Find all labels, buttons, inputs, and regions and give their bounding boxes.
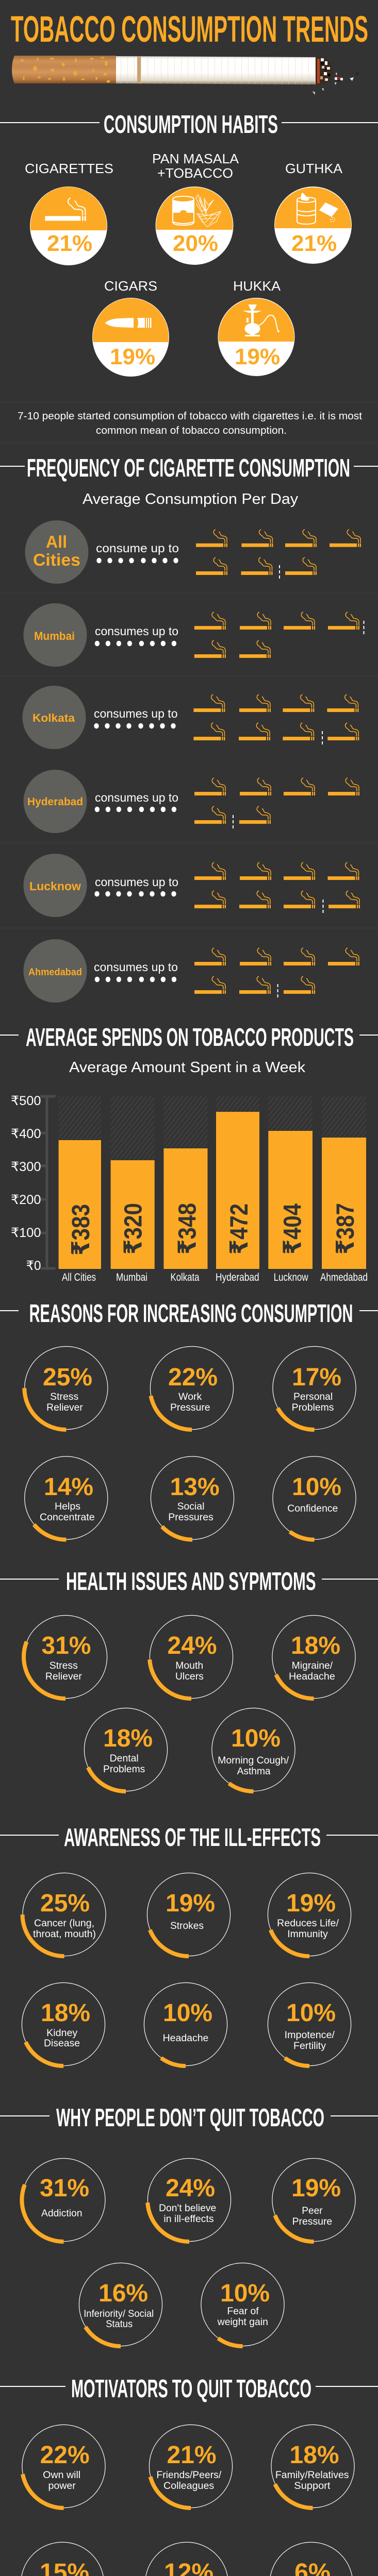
stat: dental problems 18%: Problems (103, 1764, 145, 1775)
row: lucknow (24, 854, 360, 917)
bar chart: weekly spend by city (11, 1094, 368, 1283)
stat: stress reliever 25%: Stress (50, 1392, 78, 1402)
stat: dental problems 18%: Dental (110, 1753, 139, 1764)
stat: cancer 25%: throat, mouth) (33, 1929, 96, 1940)
stat: headache 10%: 10% (163, 1999, 212, 2027)
stat: peer pressure 19% (272, 2158, 356, 2242)
stat: kidney disease 18%: Disease (44, 2038, 80, 2049)
stat: inferiority social status 16%: Inferiority/ Social (84, 2309, 154, 2319)
stat: confidence 10% (272, 1456, 356, 1539)
item: hukka 19% (218, 278, 295, 376)
bar: mumbai 320 (111, 1096, 155, 1283)
stat: stress reliever 25% (24, 1346, 108, 1430)
icon: cigar (105, 318, 152, 328)
item: cigarettes 21%: CIGARETTES (25, 161, 113, 176)
stat: mouth ulcers 24%: Ulcers (175, 1671, 204, 1682)
section: consumption habits (0, 111, 378, 443)
bar: lucknow 404: Lucknow (274, 1272, 308, 1283)
bar: mumbai 320: ₹320 (120, 1203, 147, 1255)
stat: morning cough asthma 10%: Asthma (237, 1766, 271, 1777)
stat: headache 10% (144, 1982, 227, 2066)
row: lucknow: Lucknow (29, 879, 81, 893)
stat: helps concentrate 14% (24, 1456, 108, 1539)
stat: fear of weight gain 10%: 10% (220, 2280, 270, 2307)
y axis: ₹0 (26, 1259, 41, 1273)
stat: fear of weight gain 10% (201, 2263, 285, 2346)
stat: mouth ulcers 24%: Mouth (175, 1660, 203, 1671)
stat: don't believe 24%: Don't believe (159, 2203, 216, 2214)
bar: all cities 383: ₹383 (68, 1204, 95, 1256)
bar: ahmedabad 387: ₹387 (332, 1203, 359, 1255)
stat: impotence fertility 10%: Fertility (293, 2041, 326, 2052)
row: mumbai: consumes up to (95, 624, 178, 638)
subheading: average consumption per day: Average Consumption Per Day (83, 491, 299, 507)
stat: family relatives support 18%: 18% (290, 2442, 339, 2469)
stat: stress reliever 31%: Stress (50, 1660, 78, 1671)
stat: don't believe 24%: in ill-effects (163, 2214, 214, 2225)
stat: stress reliever 25%: 25% (43, 1364, 92, 1391)
item: pan masala + tobacco 20%: PAN MASALA (152, 151, 239, 166)
row: hyderabad (24, 770, 359, 833)
item: pan masala + tobacco 20%: 20% (173, 231, 218, 256)
stat: strokes 19% (147, 1873, 231, 1956)
section: awareness of the ill-effects (0, 1824, 378, 2066)
section: motivators to quit tobacco (0, 2375, 378, 2576)
stat: helps concentrate 14%: 14% (44, 1473, 93, 1501)
stat: inferiority social status 16%: Status (106, 2319, 133, 2330)
stat: morning cough asthma 10%: Morning Cough/ (218, 1755, 289, 1766)
stat: personal problems 17%: Personal (293, 1392, 333, 1402)
row: kolkata (23, 686, 359, 749)
section: average spends on tobacco products (0, 1024, 378, 1283)
item: guthka 21%: GUTHKA (285, 161, 343, 176)
y axis: ₹100 (11, 1226, 41, 1240)
item: pan masala + tobacco 20% (152, 151, 239, 265)
y axis: ₹400 (11, 1127, 41, 1141)
stat: impotence fertility 10%: 10% (286, 1999, 336, 2027)
row: all cities: consume up to (96, 541, 179, 555)
callout: cigarettes note: 7-10 people started consumption of tobacco with cigarettes i.e. it is most (18, 411, 362, 422)
row: mumbai (24, 603, 364, 667)
stat: family relatives support 18%: Support (294, 2481, 331, 2492)
stat: stress reliever 31% (24, 1615, 107, 1699)
stat: personal problems 17% (272, 1346, 356, 1430)
stat: cancer 25%: 25% (40, 1890, 90, 1917)
section: frequency of cigarette consumption (0, 454, 378, 1003)
stat: don't believe 24% (147, 2158, 231, 2242)
stat: confidence 10%: 10% (292, 1473, 341, 1501)
row: hyderabad: Hyderabad (27, 796, 83, 808)
row: mumbai: Mumbai (34, 630, 75, 642)
stat: mouth ulcers 24% (150, 1615, 233, 1699)
item: cigarettes 21% (25, 161, 113, 265)
item: guthka 21% (274, 161, 352, 264)
y axis: ₹500 (11, 1094, 41, 1108)
stat: peer pressure 19%: Pressure (292, 2216, 332, 2227)
row: hyderabad: consumes up to (95, 791, 178, 804)
stat: partner spouse 15% (21, 2542, 104, 2576)
stat: work pressure 22% (150, 1346, 234, 1430)
bar: hyderabad 472 (216, 1096, 259, 1283)
bar: mumbai 320: Mumbai (116, 1272, 147, 1283)
stat: fear of weight gain 10%: weight gain (217, 2317, 268, 2328)
row: ahmedabad (24, 939, 359, 1003)
stat: stress reliever 31%: 31% (41, 1632, 91, 1659)
subheading: average amount spent in a week: Average Amount Spent in a Week (69, 1059, 306, 1076)
row: kolkata: consumes up to (94, 707, 177, 720)
stat: own will power 22% (22, 2425, 105, 2508)
stat: doctor councellor 12% (145, 2542, 228, 2576)
row: ahmedabad: Ahmedabad (28, 967, 82, 978)
icon: cigarette (45, 198, 86, 221)
stat: own will power 22%: Own will (43, 2470, 80, 2481)
item: hukka 19%: HUKKA (233, 278, 281, 294)
stat: work pressure 22%: Pressure (170, 1402, 210, 1413)
bar: kolkata 348: Kolkata (170, 1272, 200, 1283)
stat: reduces life 19%: Immunity (287, 1929, 328, 1940)
stat: friends peers colleagues 21% (149, 2425, 233, 2508)
stat: peer pressure 19%: 19% (291, 2175, 341, 2202)
stat: migraine headache 18% (272, 1615, 356, 1699)
item: guthka 21%: 21% (291, 231, 337, 256)
illustration: burning cigarette (12, 56, 359, 95)
stat: morning cough asthma 10% (211, 1708, 295, 1791)
stat: own will power 22%: 22% (40, 2442, 90, 2469)
stat: inferiority social status 16%: 16% (98, 2280, 148, 2307)
item: cigars 19% (92, 278, 169, 377)
icon: tin and sachet (297, 193, 338, 224)
stat: stress reliever 31%: Reliever (45, 1671, 83, 1682)
stat: dental problems 18%: 18% (103, 1725, 153, 1752)
icon: can and tobacco leaves (173, 195, 221, 227)
item: cigarettes 21%: 21% (47, 231, 92, 256)
row: ahmedabad: consumes up to (94, 960, 178, 974)
stat: dental problems 18% (84, 1708, 168, 1791)
stat: work pressure 22%: 22% (168, 1364, 218, 1391)
stat: migraine headache 18%: 18% (291, 1632, 340, 1659)
stat: cancer 25%: Cancer (lung, (34, 1918, 94, 1929)
y axis: ₹200 (11, 1193, 41, 1207)
stat: addiction 31%: 31% (40, 2175, 89, 2202)
stat: personal problems 17%: Problems (292, 1402, 334, 1413)
stat: friends peers colleagues 21%: Colleagues (163, 2481, 214, 2492)
stat: own will power 22%: power (48, 2481, 76, 2492)
stat: peer pressure 19%: Peer (302, 2206, 323, 2216)
stat: family relatives support 18% (271, 2425, 355, 2508)
section: reasons for increasing consumption (0, 1300, 378, 1539)
bar: hyderabad 472: ₹472 (226, 1204, 253, 1255)
bar: ahmedabad 387: Ahmedabad (320, 1272, 368, 1283)
bar: ahmedabad 387 (320, 1096, 368, 1283)
y axis: ₹300 (11, 1160, 41, 1174)
callout: cigarettes note (0, 402, 378, 443)
stat: mouth ulcers 24%: 24% (167, 1632, 217, 1659)
row: kolkata: Kolkata (32, 711, 75, 724)
stat: social pressures 13%: Social (177, 1501, 204, 1512)
stat: migraine headache 18%: Migraine/ (292, 1660, 333, 1671)
callout: cigarettes note: common mean of tobacco consumption. (96, 425, 287, 436)
section: health issues and symptoms (0, 1568, 378, 1791)
stat: morning cough asthma 10%: 10% (231, 1725, 281, 1752)
stat: kidney disease 18%: 18% (41, 1999, 90, 2027)
bar: lucknow 404 (268, 1096, 313, 1283)
bar: all cities 383 (59, 1096, 101, 1283)
stat: cancer 25% (23, 1873, 106, 1956)
bar: all cities 383: All Cities (62, 1272, 96, 1283)
stat: friends peers colleagues 21%: 21% (167, 2442, 217, 2469)
stat: work pressure 22%: Work (178, 1392, 202, 1402)
item: cigars 19%: 19% (110, 344, 155, 369)
bar: kolkata 348 (163, 1096, 207, 1283)
stat: friends peers colleagues 21%: Friends/Peers/ (156, 2470, 222, 2481)
stat: helps concentrate 14%: Concentrate (40, 1512, 95, 1523)
y axis (11, 1094, 56, 1273)
stat: confidence 10%: Confidence (287, 1503, 338, 1514)
stat: social pressures 13%: 13% (170, 1473, 220, 1501)
stat: migraine headache 18%: Headache (289, 1671, 335, 1682)
stat: inferiority social status 16% (79, 2263, 162, 2346)
stat: kidney disease 18%: Kidney (46, 2028, 78, 2039)
stat: fear of weight gain 10%: Fear of (227, 2306, 259, 2317)
item: hukka 19%: 19% (235, 344, 280, 369)
item: cigars 19%: CIGARS (104, 278, 157, 294)
stat: impotence fertility 10% (268, 1982, 351, 2066)
stat: social pressures 13% (151, 1456, 234, 1539)
stat: impotence fertility 10%: Impotence/ (285, 2030, 335, 2041)
item: pan masala + tobacco 20%: +TOBACCO (157, 165, 233, 181)
bar: kolkata 348: ₹348 (174, 1203, 202, 1255)
stat: kidney disease 18% (22, 1982, 105, 2066)
stat: don't believe 24%: 24% (166, 2175, 215, 2202)
stat: helps concentrate 14%: Helps (55, 1501, 80, 1512)
stat: addiction 31% (22, 2158, 105, 2242)
row: all cities: All (46, 532, 67, 551)
stat: stress reliever 25%: Reliever (46, 1402, 83, 1413)
stat: social pressures 13%: Pressures (168, 1512, 213, 1523)
icon: hukka (243, 304, 280, 336)
section: why people don't quit tobacco (0, 2104, 378, 2346)
stat: family relatives support 18%: Family/Relatives (275, 2470, 349, 2481)
stat: headache 10%: Headache (163, 2033, 208, 2044)
row: all cities (25, 520, 361, 584)
stat: reduces life 19%: Reduces Life/ (277, 1918, 339, 1929)
row: lucknow: consumes up to (95, 875, 178, 889)
row: all cities: Cities (33, 550, 80, 569)
stat: health issues 6% (269, 2542, 353, 2576)
stat: personal problems 17%: 17% (292, 1364, 341, 1391)
stat: reduces life 19%: 19% (286, 1890, 336, 1917)
stat: addiction 31%: Addiction (41, 2208, 83, 2219)
stat: strokes 19%: 19% (166, 1890, 215, 1917)
bar: lucknow 404: ₹404 (280, 1204, 306, 1255)
stat: strokes 19%: Strokes (170, 1921, 204, 1931)
stat: reduces life 19% (268, 1873, 351, 1956)
bar: hyderabad 472: Hyderabad (216, 1272, 259, 1283)
